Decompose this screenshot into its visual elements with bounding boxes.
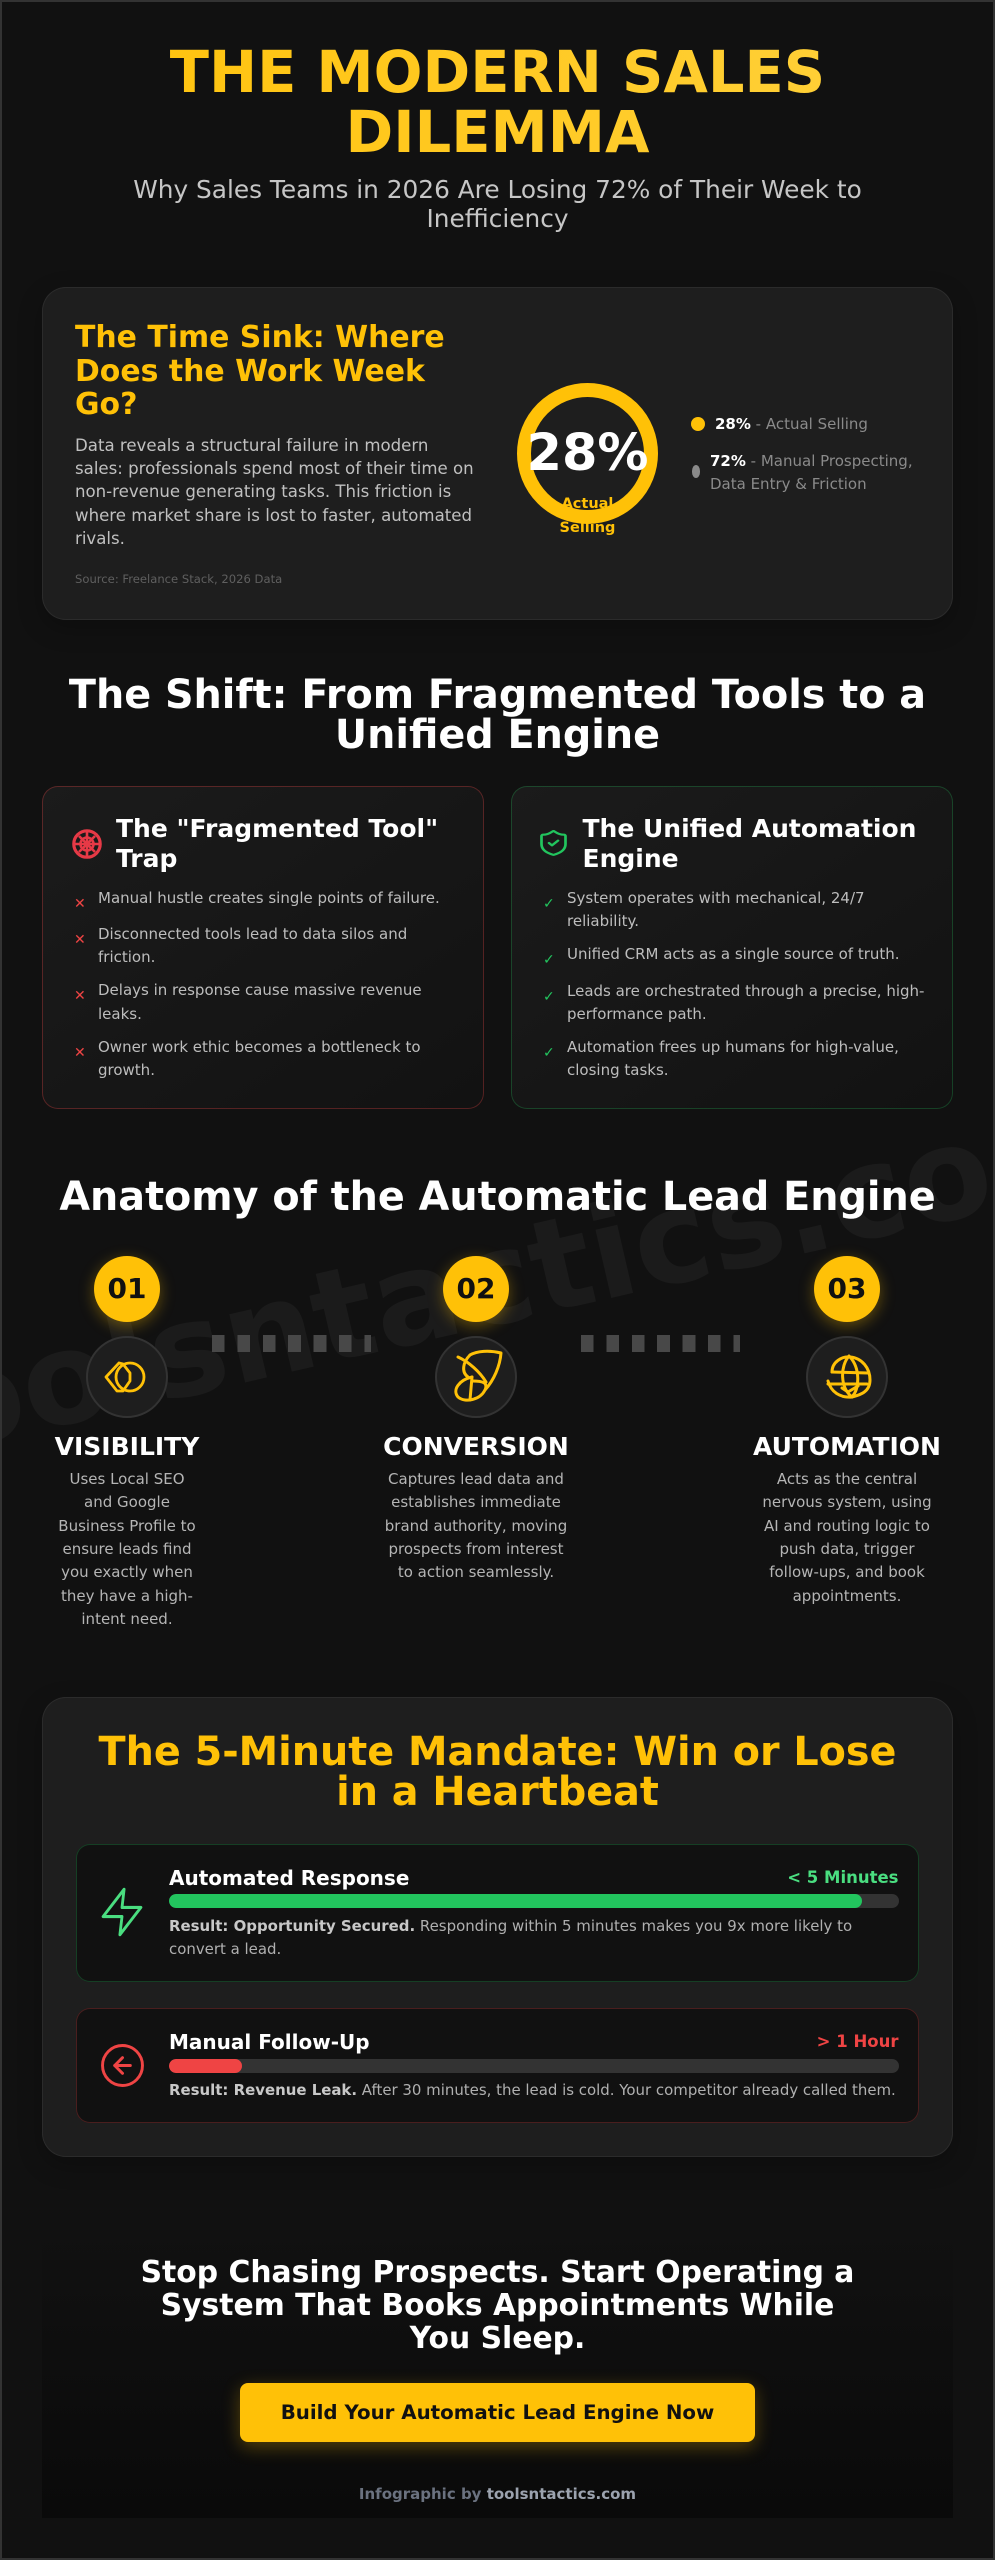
heading: The 5-Minute Mandate: Win or Lose bbox=[99, 1729, 896, 1775]
list item bbox=[74, 981, 422, 1023]
legend dot: actual selling bbox=[691, 417, 705, 431]
step: conversion bbox=[383, 1252, 569, 1581]
source: Source: Freelance Stack, 2026 Data bbox=[75, 572, 282, 586]
time: > 1 Hour bbox=[817, 2032, 898, 2051]
result text: convert a lead. bbox=[169, 1940, 281, 1958]
step text: you exactly when bbox=[61, 1563, 193, 1581]
step text: Acts as the central bbox=[777, 1470, 917, 1488]
panel: unified automation engine: ✓ bbox=[543, 1045, 555, 1061]
list item: leaks. bbox=[98, 1005, 142, 1023]
donut label: Actual bbox=[562, 496, 613, 512]
heading: the shift: The Shift: From Fragmented Tools to a bbox=[69, 672, 926, 718]
step text bbox=[385, 1470, 567, 1581]
title: THE MODERN SALES bbox=[170, 39, 825, 106]
step text: Captures lead data and bbox=[388, 1470, 564, 1488]
panel: unified automation engine bbox=[511, 786, 953, 1109]
list item: Owner work ethic becomes a bottleneck to bbox=[98, 1038, 421, 1056]
step number: 03 bbox=[828, 1272, 866, 1305]
list item: Leads are orchestrated through a precise, high- bbox=[567, 982, 924, 1000]
row title: Manual Follow-Up bbox=[169, 2030, 370, 2054]
legend text: manual: 72% - Manual Prospecting, bbox=[710, 452, 913, 470]
subtitle bbox=[133, 175, 862, 233]
step label: AUTOMATION bbox=[753, 1432, 941, 1460]
step text: nervous system, using bbox=[762, 1493, 932, 1511]
subtitle: Why Sales Teams in 2026 Are Losing 72% of Their Week to bbox=[133, 175, 862, 204]
legend text: actual selling: 28% - Actual Selling bbox=[715, 415, 868, 433]
step number bbox=[814, 1256, 880, 1322]
heading: the shift bbox=[69, 672, 926, 758]
heading: The Unified Automation bbox=[582, 814, 916, 842]
step text: to action seamlessly. bbox=[398, 1563, 554, 1581]
heading: The "Fragmented Tool" bbox=[116, 814, 438, 842]
step text: intent need. bbox=[81, 1610, 173, 1628]
icon: diamond and circle bbox=[86, 1336, 168, 1418]
list item bbox=[543, 1038, 899, 1079]
step text: prospects from interest bbox=[388, 1540, 564, 1558]
heading: Trap bbox=[116, 844, 177, 872]
list item: friction. bbox=[98, 948, 155, 966]
step text: follow-ups, and book bbox=[769, 1563, 925, 1581]
title bbox=[0, 43, 995, 163]
step text: establishes immediate bbox=[391, 1493, 561, 1511]
heading bbox=[98, 1729, 896, 1815]
legend text: manual bbox=[710, 452, 913, 492]
progress bar bbox=[169, 1894, 898, 1908]
time: < 5 Minutes bbox=[787, 1868, 898, 1887]
step text: ensure leads find bbox=[62, 1540, 192, 1558]
heading: time sink: Does the Work Week bbox=[75, 354, 425, 388]
step text: brand authority, moving bbox=[385, 1517, 567, 1535]
heading bbox=[116, 814, 438, 872]
progress bar bbox=[169, 2059, 898, 2073]
heading: time sink: Go? bbox=[75, 387, 137, 422]
list item: performance path. bbox=[567, 1005, 707, 1023]
heading: in a Heartbeat bbox=[336, 1769, 659, 1815]
donut label bbox=[560, 496, 615, 536]
row: automated response bbox=[76, 1844, 919, 1982]
cta button bbox=[240, 2383, 755, 2442]
panel: time sink bbox=[42, 287, 953, 620]
heading bbox=[582, 814, 916, 872]
result text: Result: Opportunity Secured. Responding within 5 minutes makes you 9x more likely to bbox=[169, 1917, 852, 1935]
heading: time sink: The Time Sink: Where bbox=[75, 320, 445, 355]
step number bbox=[443, 1256, 509, 1322]
panel: fragmented tool trap: ✕ bbox=[74, 896, 86, 912]
step text: AI and routing logic to bbox=[764, 1517, 930, 1535]
step label: CONVERSION bbox=[383, 1432, 569, 1460]
legend text: manual: Data Entry & Friction bbox=[710, 474, 867, 492]
connector 1 bbox=[212, 1335, 371, 1352]
icon: globe bbox=[806, 1336, 888, 1418]
heading: Engine bbox=[582, 844, 679, 872]
panel: unified automation engine: ✓ bbox=[543, 896, 555, 912]
row: manual follow-up bbox=[76, 2008, 919, 2123]
list item: Manual hustle creates single points of failure. bbox=[98, 888, 440, 906]
legend dot: manual bbox=[692, 465, 700, 478]
panel: five minute mandate bbox=[42, 1697, 953, 2157]
cta heading bbox=[141, 2255, 854, 2356]
step text: they have a high- bbox=[61, 1587, 193, 1605]
donut label: Selling bbox=[560, 520, 615, 536]
icon: lightning bbox=[102, 1888, 142, 1936]
step number bbox=[94, 1256, 160, 1322]
step number: 02 bbox=[457, 1272, 495, 1305]
list item bbox=[74, 925, 407, 966]
step text bbox=[762, 1470, 932, 1605]
step number: 01 bbox=[108, 1272, 146, 1305]
panel: call to action bbox=[42, 2232, 953, 2518]
panel: fragmented tool trap: ✕ bbox=[74, 932, 86, 948]
footer credit: Infographic by toolsntactics.com bbox=[359, 2485, 636, 2503]
cta button: Build Your Automatic Lead Engine Now bbox=[281, 2401, 714, 2424]
step text: push data, trigger bbox=[779, 1540, 915, 1558]
step: automation bbox=[753, 1252, 941, 1605]
heading: the shift: Unified Engine bbox=[335, 712, 660, 758]
list item bbox=[543, 982, 924, 1023]
row title: Automated Response bbox=[169, 1866, 409, 1890]
panel: unified automation engine: ✓ bbox=[543, 952, 555, 968]
list item: reliability. bbox=[567, 912, 639, 930]
panel: fragmented tool trap: ✕ bbox=[74, 988, 86, 1004]
step text: and Google bbox=[84, 1493, 170, 1511]
cta heading: Stop Chasing Prospects. Start Operating a bbox=[141, 2255, 854, 2290]
step text: Business Profile to bbox=[58, 1517, 196, 1535]
icon: back arrow bbox=[101, 2044, 144, 2087]
result text: Result: Revenue Leak. After 30 minutes, the lead is cold. Your competitor already called them. bbox=[169, 2081, 896, 2099]
list item: Automation frees up humans for high-value, bbox=[567, 1038, 899, 1056]
body text: where market share is lost to faster, automated bbox=[75, 506, 472, 525]
list item: closing tasks. bbox=[567, 1061, 669, 1079]
list item: growth. bbox=[98, 1061, 155, 1079]
bar fill bbox=[169, 2059, 242, 2073]
list item: Disconnected tools lead to data silos and bbox=[98, 925, 407, 943]
donut ring bbox=[517, 383, 658, 524]
title: DILEMMA bbox=[346, 99, 649, 166]
icon: red target bbox=[72, 829, 102, 859]
body text: rivals. bbox=[75, 529, 125, 548]
subtitle: Inefficiency bbox=[426, 204, 569, 233]
connector 2 bbox=[581, 1335, 740, 1352]
body text: non-revenue generating tasks. This friction is bbox=[75, 482, 451, 501]
cta heading: System That Books Appointments While bbox=[161, 2288, 834, 2323]
body text: sales: professionals spend most of their time on bbox=[75, 459, 474, 478]
bar fill bbox=[169, 1894, 862, 1908]
step: visibility bbox=[54, 1252, 200, 1628]
body text bbox=[75, 436, 474, 548]
panel: fragmented tool trap: ✕ bbox=[74, 1044, 86, 1060]
cta heading: You Sleep. bbox=[410, 2321, 585, 2356]
body text: Data reveals a structural failure in modern bbox=[75, 436, 428, 455]
list item: System operates with mechanical, 24/7 bbox=[567, 888, 865, 906]
result text bbox=[169, 1917, 852, 1958]
list item bbox=[543, 888, 865, 930]
step label: VISIBILITY bbox=[55, 1432, 199, 1460]
step text: Uses Local SEO bbox=[69, 1470, 185, 1488]
legend bbox=[691, 415, 913, 492]
step text bbox=[58, 1470, 196, 1628]
step text: appointments. bbox=[793, 1587, 901, 1605]
heading: anatomy: Anatomy of the Automatic Lead Engine bbox=[59, 1174, 936, 1220]
list item: Delays in response cause massive revenue bbox=[98, 981, 422, 999]
heading: time sink bbox=[75, 320, 445, 422]
panel: unified automation engine: ✓ bbox=[543, 988, 555, 1004]
donut value: 28% bbox=[526, 424, 649, 482]
panel: fragmented tool trap bbox=[42, 786, 484, 1109]
icon: rocket bbox=[435, 1336, 517, 1418]
donut chart bbox=[517, 383, 658, 536]
list item: Unified CRM acts as a single source of truth. bbox=[567, 945, 900, 963]
icon: green shield bbox=[540, 830, 567, 856]
list item bbox=[74, 1038, 421, 1079]
